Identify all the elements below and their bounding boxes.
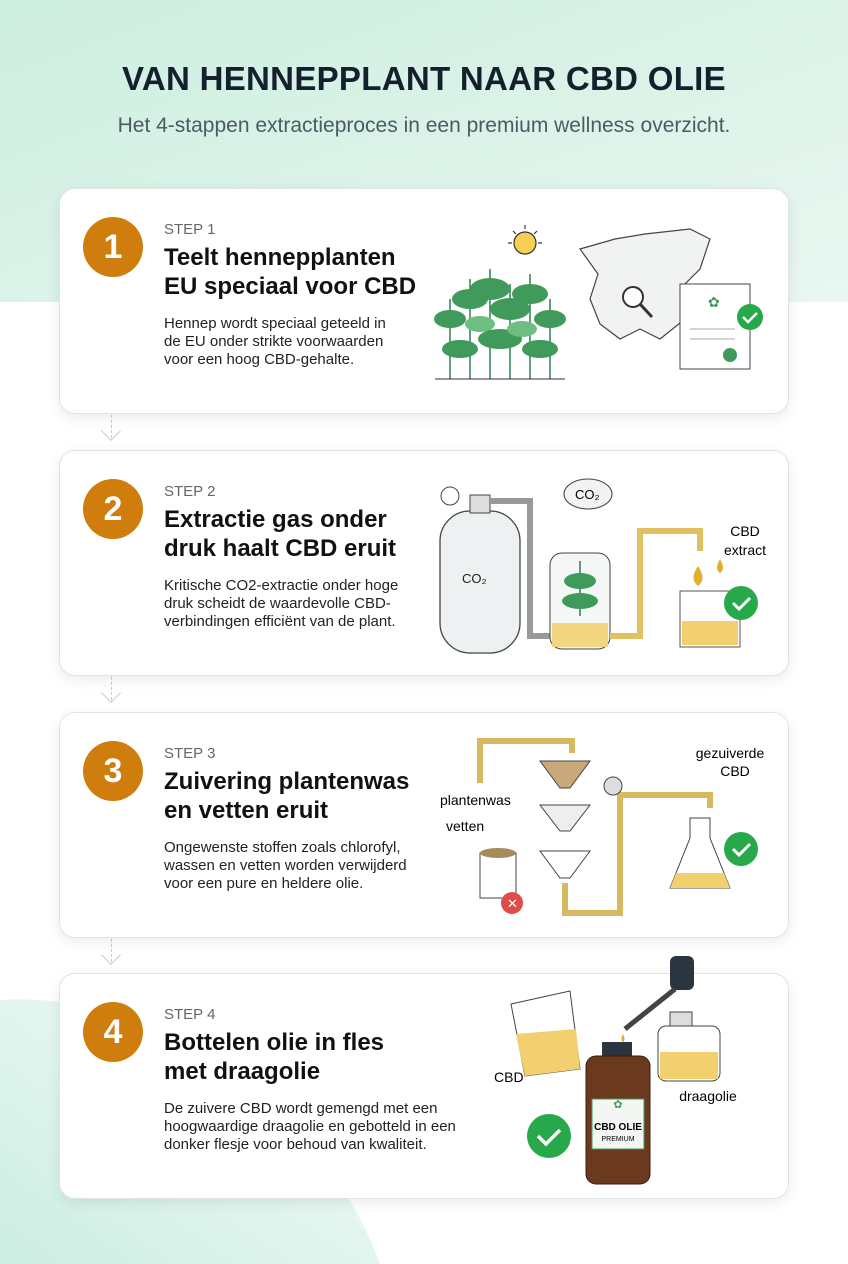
illustration: bottling: CBD OLIE <box>594 1122 642 1133</box>
heading: Extractie gas onder <box>164 506 387 533</box>
illustration: CO2 extraction <box>439 478 766 654</box>
number badge 1 <box>83 217 143 277</box>
illustration: filtration <box>440 738 764 916</box>
icon: check <box>724 832 758 866</box>
text <box>164 839 407 892</box>
illustration: plants, sun, EU map, certificate: ✿ <box>708 294 720 310</box>
panel: step 4 <box>59 973 789 1199</box>
illustration: plants, sun, EU map, certificate <box>434 225 763 380</box>
step label: STEP 2 <box>164 483 215 500</box>
number badge 2 <box>83 479 143 539</box>
number badge 3 <box>83 741 143 801</box>
illustration: bottling <box>494 956 737 1184</box>
icon: check <box>724 586 758 620</box>
illustration: bottling: PREMIUM <box>601 1136 635 1143</box>
text: verbindingen efficiënt van de plant. <box>164 613 396 630</box>
heading: Zuivering plantenwas <box>164 768 409 795</box>
text <box>164 315 386 368</box>
illustration: filtration: vetten <box>446 818 484 834</box>
step label: STEP 4 <box>164 1006 215 1023</box>
panel: step 3 <box>59 712 789 938</box>
text: De zuivere CBD wordt gemengd met een <box>164 1100 437 1117</box>
text <box>164 1100 456 1153</box>
illustration: CO2 extraction: CBD <box>730 523 760 539</box>
illustration: filtration: gezuiverde <box>696 745 764 761</box>
text: de EU onder strikte voorwaarden <box>164 333 383 350</box>
illustration: bottling: draagolie <box>679 1088 737 1104</box>
number badge 1: 1 <box>104 228 122 266</box>
text: wassen en vetten worden verwijderd <box>164 857 407 874</box>
heading <box>164 244 416 300</box>
heading: EU speciaal voor CBD <box>164 273 416 300</box>
number badge 4: 4 <box>104 1013 122 1051</box>
connector line <box>111 278 112 438</box>
text: donker flesje voor behoud van kwaliteit. <box>164 1136 427 1153</box>
heading: Bottelen olie in fles <box>164 1029 384 1056</box>
heading: Teelt hennepplanten <box>164 244 396 271</box>
panel: step 2 <box>59 450 789 676</box>
text <box>164 577 398 630</box>
illustration: bottling: ✿ <box>613 1099 623 1111</box>
heading <box>164 506 396 562</box>
illustration: filtration: CBD <box>720 763 750 779</box>
step label: STEP 3 <box>164 745 215 762</box>
heading: druk haalt CBD eruit <box>164 535 396 562</box>
heading <box>164 768 409 824</box>
text: voor een pure en heldere olie. <box>164 875 363 892</box>
text: druk scheidt de waardevolle CBD- <box>164 595 391 612</box>
subtitle: Het 4-stappen extractieproces in een premium wellness overzicht. <box>118 114 730 137</box>
illustration: filtration: ✕ <box>507 896 518 911</box>
illustration: CO2 extraction: CO₂ <box>462 571 487 586</box>
number badge 3: 3 <box>104 752 122 790</box>
text: Ongewenste stoffen zoals chlorofyl, <box>164 839 401 856</box>
illustration: CO2 extraction: extract <box>724 542 766 558</box>
text: voor een hoog CBD-gehalte. <box>164 351 354 368</box>
illustration: bottling: CBD <box>494 1069 524 1085</box>
text: Kritische CO2-extractie onder hoge <box>164 577 398 594</box>
illustration: CO2 extraction: CO₂ <box>575 487 600 502</box>
title: VAN HENNEPPLANT NAAR CBD OLIE <box>122 60 726 97</box>
heading <box>164 1029 384 1085</box>
step label: STEP 1 <box>164 221 215 238</box>
text: Hennep wordt speciaal geteeld in <box>164 315 386 332</box>
text: hoogwaardige draagolie en gebotteld in een <box>164 1118 456 1135</box>
heading: en vetten eruit <box>164 797 328 824</box>
number badge 2: 2 <box>104 490 122 528</box>
panel: step 1 <box>59 188 789 414</box>
illustration: filtration: plantenwas <box>440 792 511 808</box>
number badge 4 <box>83 1002 143 1062</box>
heading: met draagolie <box>164 1058 320 1085</box>
